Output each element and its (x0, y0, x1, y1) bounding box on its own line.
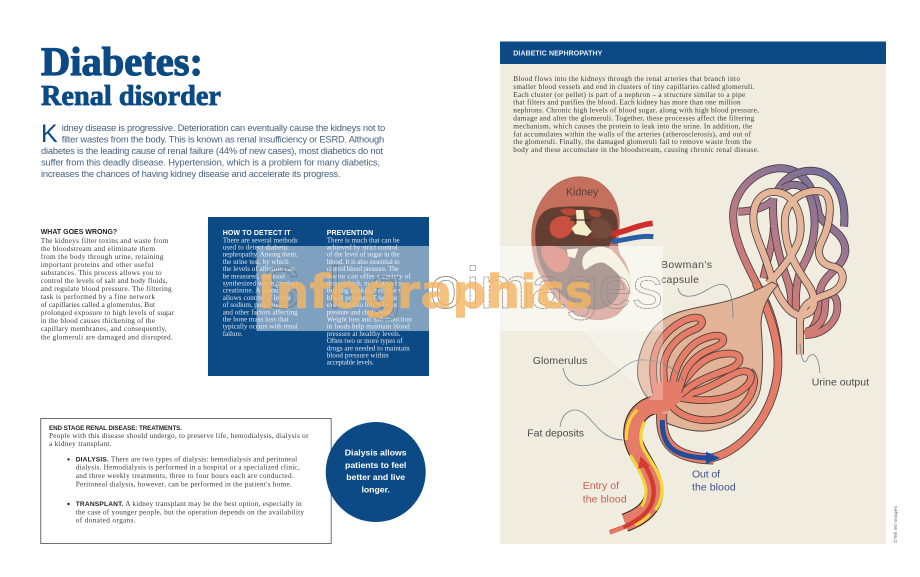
text block: nephropathy explanation: fat accumulates within the walls of the arteries (atherosclerosis), and out of (513, 129, 752, 138)
text block: how to detect it: used to detect diabetic (223, 244, 289, 252)
text block: what goes wrong: The kidneys filter toxins and waste from (41, 236, 169, 245)
text block: nephropathy explanation: body and these accumulate in the bloodstream, causing chronic renal disease. (513, 145, 759, 154)
text block: how to detect it (223, 230, 298, 338)
text block: what goes wrong: capillary membranes, and consequently, (41, 324, 167, 333)
text block: how to detect it: nephropathy. Among them, (223, 251, 298, 259)
illustration: afferent vessel with fat deposits (610, 382, 720, 532)
intro paragraph: diabetes is the leading cause of renal failure (44% of new cases), most diabetics do not (41, 145, 383, 156)
intro paragraph: suffer from this deadly disease. Hypertension, which is a problem for many diabetics, (41, 156, 380, 168)
text block: prevention: drugs are needed to maintain (327, 344, 410, 352)
text block: what goes wrong (41, 229, 175, 342)
text block: how to detect it: There are several methods (223, 236, 298, 244)
text block: what goes wrong: in the blood causes thickening of the (41, 316, 155, 325)
text block: prevention: Weight loss and salt reduction (327, 316, 412, 324)
panel: end stage renal disease treatments (41, 418, 331, 544)
text block: how to detect it: allows control of levels (223, 294, 291, 302)
bullet: transplant (67, 499, 304, 525)
watermark: Infographics (258, 265, 593, 319)
text block: what goes wrong: control the levels of salt and body fluids, (41, 276, 168, 285)
text block: what goes wrong: of capillaries called a glomerulus. But (41, 300, 155, 309)
bullet: transplant: TRANSPLANT. A kidney transplant may be the best option, especially in (76, 499, 302, 508)
text block: how to detect it: failure. (223, 330, 243, 338)
intro paragraph (41, 120, 385, 179)
text block: how to detect it: be measured, or blood (223, 272, 285, 280)
bullet: dialysis: DIALYSIS. There are two types of dialysis: hemodialysis and peritoneal (76, 455, 297, 464)
text block: prevention: pressure at healthy levels. (327, 330, 401, 338)
text block: nephropathy explanation: nephrons. Chronic high levels of blood sugar, along with high blood pressure, (513, 106, 759, 115)
text block: what goes wrong: the bloodstream and eliminate them (41, 244, 155, 253)
bullet: transplant: the case of younger people, but the operation depends on the availability (76, 507, 304, 516)
illustration: kidney cross-section (532, 177, 653, 320)
callout circle: dialysis: patients to feel (345, 460, 406, 470)
text block: prevention: Often two or more types of (327, 337, 403, 345)
text block: how to detect it: and other factors affecting (223, 308, 298, 316)
text block: what goes wrong: important proteins and other useful (41, 260, 153, 269)
illustration: glomerulus capillary loops (648, 318, 754, 420)
text block: what goes wrong: from the body through urine, retaining (41, 252, 164, 261)
text block: how to detect it: of sodium, potassium (223, 301, 283, 309)
panel: how to detect and prevention (208, 217, 429, 376)
illustration: kidney cross-section: Kidney (566, 187, 599, 199)
text block: nephropathy explanation: Each cluster (or pellet) is part of a nephron – a structure similar to a pipe (513, 90, 745, 99)
text block: prevention: acceptable levels. (327, 359, 374, 367)
panel: diabetic nephropathy (500, 42, 886, 544)
labels and leader lines: the blood (692, 482, 736, 494)
intro paragraph: filter wastes from the body. This is known as renal insufficiency or ESRD. Although (62, 134, 384, 144)
text block: prevention: PREVENTION (327, 230, 373, 237)
labels and leader lines: capsule (661, 274, 699, 286)
text block: nephropathy explanation: the glomeruli. Finally, the damaged glomeruli fail to remove waste from the (513, 137, 752, 146)
text block: prevention: of the level of sugar in the (327, 251, 400, 259)
text block: nephropathy explanation: mechanism, which causes the protein to leak into the urine. In addition, the (513, 121, 752, 130)
labels and leader lines: Entry of (583, 480, 619, 492)
intro paragraph: increases the chances of having kidney disease and accelerate its progress. (41, 168, 340, 179)
labels and leader lines: Urine output (812, 377, 869, 389)
bullet: dialysis: and three weekly treatments, three to four hours each are conducted. (76, 471, 294, 480)
labels and leader lines: Out of (692, 468, 720, 480)
bullet: dialysis: dialysis. Hemodialysis is performed in a hospital or a specialized clinic, (76, 463, 300, 472)
bullet: transplant: of donated organs. (76, 516, 136, 525)
title: Diabetes: (41, 39, 203, 84)
text block: how to detect it: the levels of albumin can (223, 265, 295, 273)
panel: diabetic nephropathy: DIABETIC NEPHROPATHY (513, 51, 603, 58)
text block: prevention: treating the kidneys, lower (327, 287, 403, 295)
text block: nephropathy explanation: that filters and purifies the blood. Each kidney has more than one million (513, 98, 741, 107)
watermark: images (466, 256, 663, 321)
icon: blue arrow out of the blood (662, 413, 720, 464)
text block: what goes wrong: prolonged exposure to high levels of sugar (41, 308, 175, 317)
image credit: ©Tell 90 Images (892, 505, 899, 543)
text block: how to detect it: HOW TO DETECT IT (223, 230, 291, 237)
text block: how to detect it: the urine test, by which (223, 258, 289, 266)
watermark: Slgo (262, 256, 462, 321)
text block: what goes wrong: the glomeruli are damaged and disrupted. (41, 332, 173, 342)
labels and leader lines: Glomerulus (533, 355, 587, 367)
labels and leader lines: the blood (583, 494, 627, 506)
text block: prevention: pressure and cholesterol. (327, 308, 393, 316)
text block: nephropathy explanation (513, 74, 759, 154)
text block: prevention: blood pressure. Diet and (327, 294, 399, 302)
title (41, 39, 221, 112)
illustration: Bowman's capsule (638, 282, 778, 431)
text block: nephropathy explanation: damage and alter the glomeruli. Together, these processes affect the filtering (513, 114, 755, 122)
text block: prevention: achieved by strict control (327, 244, 398, 252)
callout circle: dialysis: Dialysis allows (345, 448, 407, 458)
labels and leader lines: Fat deposits (527, 428, 584, 440)
callout circle: dialysis: better and live (346, 472, 405, 482)
text block: how to detect it: creatinine. A blood test (223, 287, 291, 295)
text block: prevention: control blood pressure. The (327, 265, 399, 273)
panel: end stage renal disease treatments: People with this disease should undergo, to preserve life, hemodialysis, dialysis or (49, 431, 309, 440)
text block: nephropathy explanation: Blood flows into the kidneys through the renal arteries that branch into (513, 74, 740, 83)
heading: treatments: END STAGE RENAL DISEASE: TREATMENTS. (49, 425, 182, 432)
watermark (256, 246, 663, 400)
bullet: dialysis (67, 455, 300, 488)
labels and leader lines (527, 259, 869, 506)
text block: prevention: doctor can offer a variety of (327, 272, 411, 280)
illustration: capillary tangle (733, 168, 845, 355)
text block: how to detect it: the bone mass loss that (223, 316, 289, 324)
labels and leader lines: Bowman's (661, 259, 712, 271)
bullet: dialysis: Peritoneal dialysis, however, can be performed in the patient's home. (76, 479, 292, 488)
text block: prevention: in foods help maintain blood (327, 323, 410, 331)
text block: what goes wrong: task is performed by a fine network (41, 292, 155, 301)
text block: prevention: blood. It is also essential to (327, 258, 400, 266)
text block: prevention (327, 230, 412, 367)
intro paragraph: idney disease is progressive. Deterioration can eventually cause the kidneys not to (62, 122, 385, 133)
text block: how to detect it: synthesized waste product (223, 280, 298, 288)
text block: what goes wrong: substances. This process allows you to (41, 268, 162, 277)
callout circle: dialysis (326, 422, 426, 522)
intro paragraph: K (41, 120, 58, 148)
text block: how to detect it: typically occurs with renal (223, 323, 298, 331)
panel: end stage renal disease treatments: a kidney transplant. (49, 439, 112, 448)
callout circle: dialysis: longer. (361, 484, 390, 494)
text block: prevention: blood pressure within (327, 352, 389, 360)
illustration: returning blood vessel (712, 283, 778, 458)
text block: prevention: drugs which, in addition to (327, 280, 401, 288)
text block: prevention: exercise also lower blood (327, 301, 399, 309)
text block: prevention: There is much that can be (327, 236, 400, 244)
illustration: glomerulus hub joint (641, 382, 680, 414)
text block: what goes wrong: WHAT GOES WRONG? (41, 229, 117, 236)
text block: what goes wrong: and regulate blood pressure. The filtering (41, 284, 172, 293)
title: Renal disorder (41, 81, 221, 112)
text block: nephropathy explanation: smaller blood vessels and end in clusters of tiny capillaries called glomeruli. (513, 82, 754, 91)
